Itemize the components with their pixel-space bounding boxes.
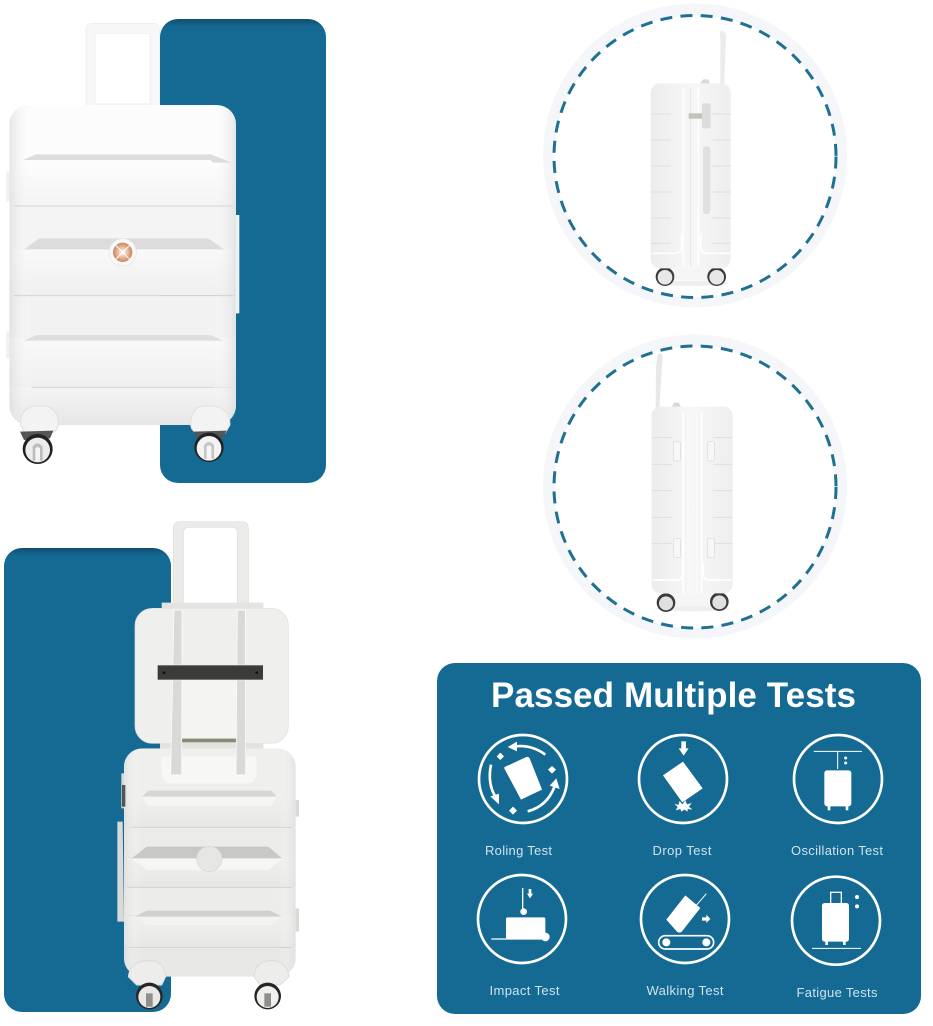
rose gold badge (109, 239, 136, 266)
heading: Passed Multiple Tests (491, 676, 856, 715)
wheel housing left (21, 406, 58, 433)
label: walking: Walking Test (646, 983, 724, 998)
lower handle tubes (171, 610, 246, 775)
label: impact: Impact Test (490, 983, 560, 998)
icon: rolling test (479, 735, 567, 823)
icon: walking test (641, 875, 729, 963)
grooves (142, 791, 277, 806)
icon: impact test (478, 875, 566, 963)
suitcase shell (9, 105, 236, 425)
right wheel (194, 431, 227, 462)
icon labels (485, 843, 883, 1000)
vanity case top handle (162, 603, 263, 608)
suitcase side view (652, 354, 733, 612)
panel: bottom-left blue backdrop (4, 548, 171, 1012)
shell ribs (13, 206, 233, 387)
suitcase side view (651, 31, 731, 286)
label: fatigue: Fatigue Tests (796, 985, 878, 1000)
front view white suitcase (6, 23, 239, 464)
recessed grooves (23, 154, 232, 163)
hinge strip (160, 743, 263, 751)
icon: fatigue test (792, 877, 880, 965)
round badge (197, 846, 222, 872)
carry-on suitcase with vanity case (117, 522, 299, 1009)
icon grid (478, 735, 882, 965)
pale circle (543, 334, 847, 638)
left wheel (136, 983, 163, 1009)
side latches and grip (117, 773, 299, 932)
shell ribs (128, 827, 292, 947)
panel background (437, 663, 921, 1014)
icon: drop test (639, 735, 727, 823)
wheel housing right (191, 406, 230, 433)
panel: passed multiple tests (437, 663, 921, 1014)
dashed ring (554, 16, 836, 298)
handle recess (162, 757, 257, 783)
dashed ring (554, 346, 836, 628)
vanity case (135, 608, 288, 743)
dashed circle with side view suitcase (lock side) (543, 4, 847, 308)
wheel housing right (254, 961, 289, 985)
label: drop: Drop Test (652, 843, 712, 858)
right wheel (254, 983, 281, 1009)
label: rolling: Roling Test (485, 843, 552, 858)
black strap (157, 665, 263, 680)
label: oscillation: Oscillation Test (791, 843, 883, 858)
wheel housing left (128, 961, 166, 985)
icon: oscillation test (794, 735, 882, 823)
carry-on shell (124, 748, 296, 977)
telescopic handle (86, 23, 159, 107)
panel: top-left blue backdrop (160, 19, 326, 483)
upper telescopic handle (173, 522, 248, 613)
pale circle (543, 4, 847, 308)
dashed circle with side view suitcase (bumper side) (543, 334, 847, 638)
left wheel (20, 431, 53, 464)
side latches (6, 172, 239, 358)
